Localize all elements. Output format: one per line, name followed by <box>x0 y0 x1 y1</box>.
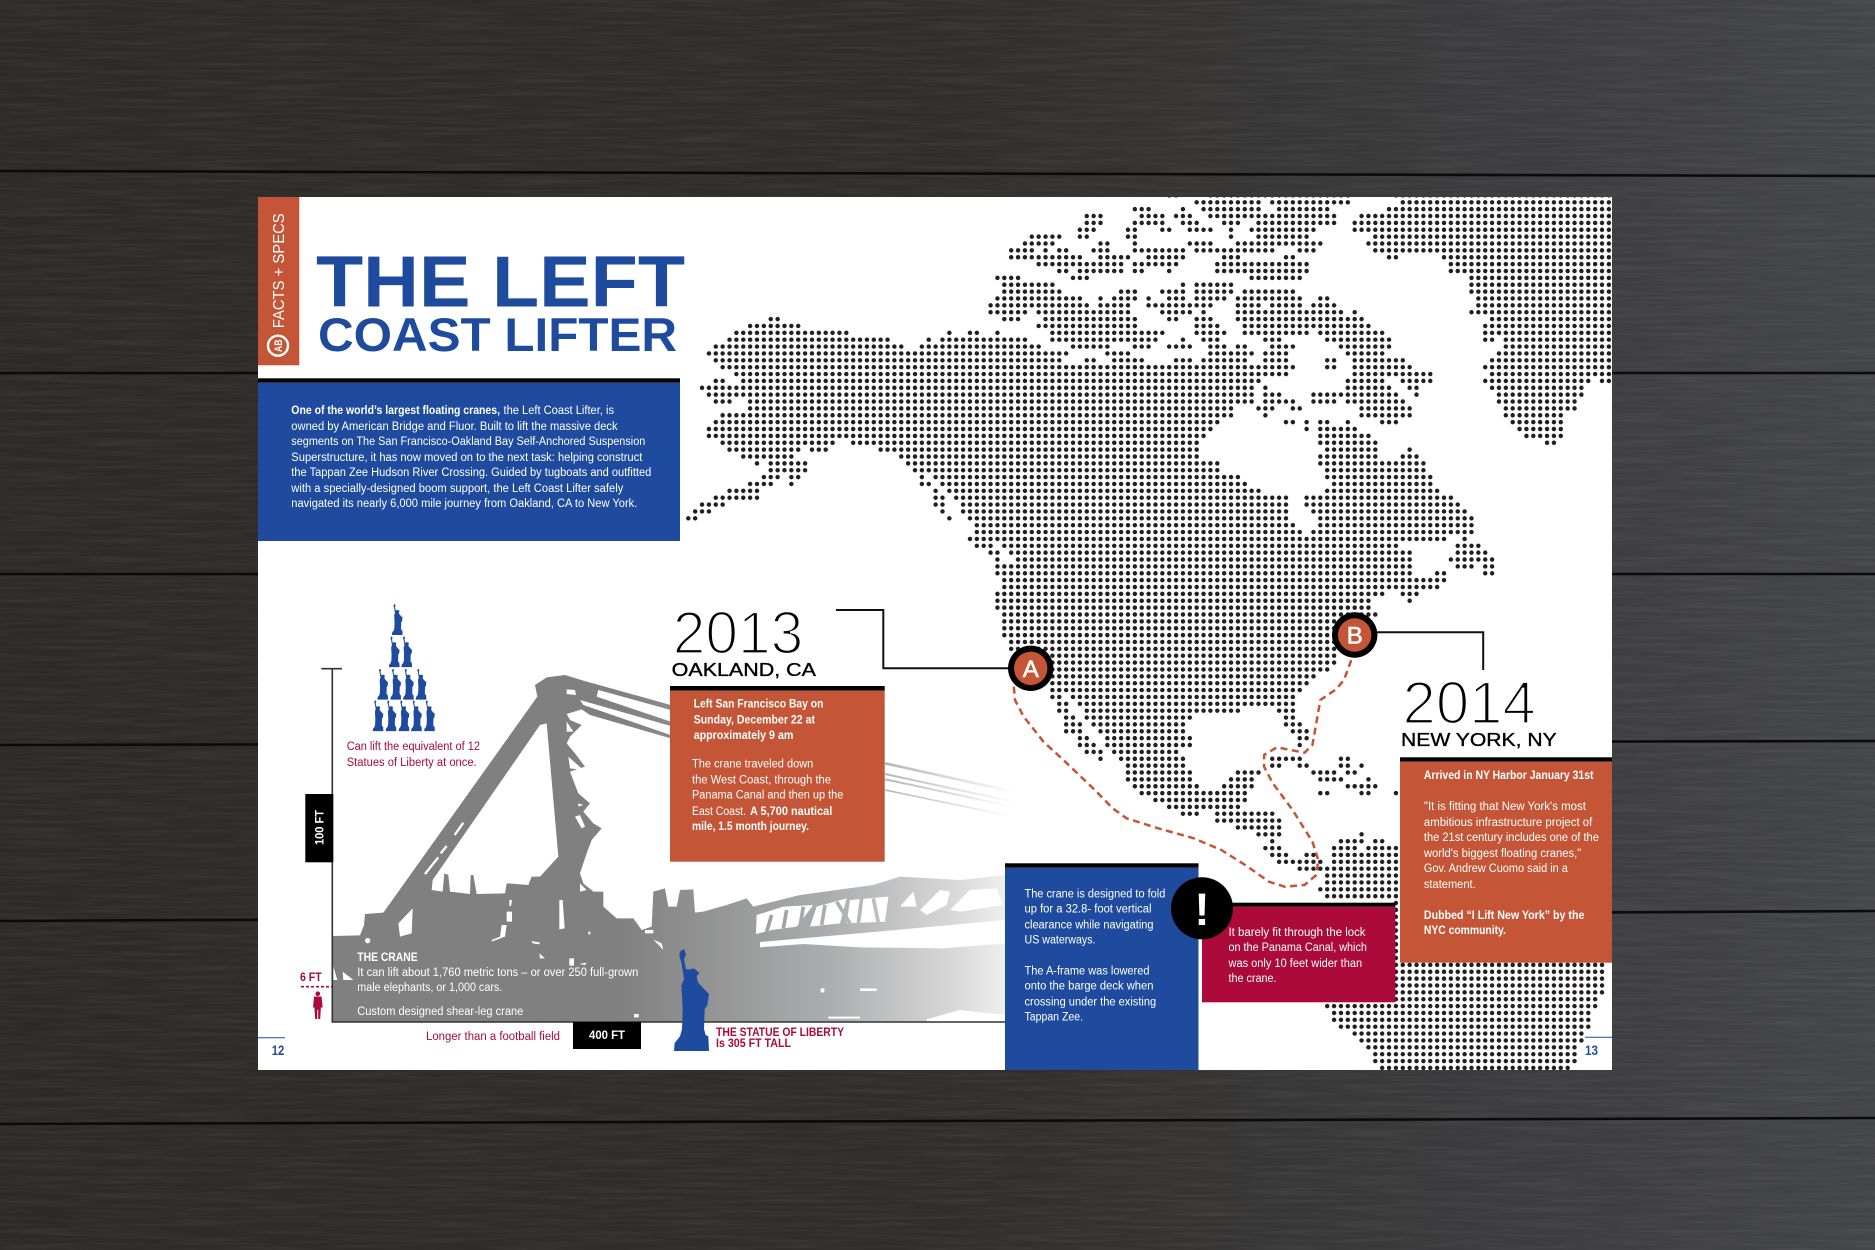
callout: lifting capacity: Statues of Liberty at once. <box>347 757 477 769</box>
label: 6 ft person: 6 FT <box>300 972 322 984</box>
panel: fold up for clearance <box>1005 863 1198 1070</box>
panel: fold up for clearance: up for a 32.8- foot vertical <box>1024 903 1152 915</box>
callout: lifting capacity: Can lift the equivalent of 12 <box>347 741 480 753</box>
panel: 2013 departure: Left San Francisco Bay on <box>694 699 823 711</box>
panel: 2014 arrival: world's biggest floating cranes," <box>1423 848 1581 860</box>
panel: intro: the Left Coast Lifter, is <box>504 405 614 417</box>
panel: 2013 departure: mile, 1.5 month journey. <box>692 821 809 833</box>
heading: 2013 Oakland: 2013 <box>673 599 803 666</box>
label: 400 ft length: 400 FT <box>589 1030 625 1042</box>
panel: fold up for clearance: The A-frame was lowered <box>1024 965 1150 977</box>
panel: fold up for clearance: onto the barge deck when <box>1024 980 1154 992</box>
panel: 2014 arrival: ambitious infrastructure project of <box>1424 817 1593 829</box>
panel: intro: owned by American Bridge and Fluor. Built to lift the massive deck <box>291 421 618 433</box>
route: dashed path from Oakland to New York <box>1014 658 1352 887</box>
page number 13 <box>1585 1037 1612 1058</box>
section tab: facts + specs <box>258 197 299 365</box>
heading: 2014 New York: NEW YORK, NY <box>1401 729 1557 750</box>
panel: panama canal: was only 10 feet wider than <box>1228 958 1362 970</box>
panel: intro: the Tappan Zee Hudson River Crossing. Guided by tugboats and outfitted <box>291 467 651 479</box>
panel: intro: navigated its nearly 6,000 mile journey from Oakland, CA to New York. <box>291 498 637 510</box>
label: statue of liberty height: Is 305 FT TALL <box>716 1038 791 1050</box>
icon: statue of liberty <box>674 949 709 1051</box>
heading: 2014 New York: 2014 <box>1402 669 1536 736</box>
panel: intro: Superstructure, it has now moved on to the next task: helping construct <box>291 452 643 464</box>
label: 400 ft length: Longer than a football field <box>426 1031 560 1043</box>
marker B: New York <box>1332 612 1377 658</box>
panel: panama canal: on the Panama Canal, which <box>1228 942 1367 954</box>
title: COAST LIFTER <box>318 308 677 361</box>
panel: fold up for clearance: The crane is designed to fold <box>1024 888 1165 900</box>
section tab: facts + specs: FACTS + SPECS <box>271 213 288 328</box>
panel: 2013 departure: A 5,700 nautical <box>750 806 832 818</box>
panel: 2014 arrival: Dubbed “I Lift New York” by the <box>1424 910 1584 922</box>
crane cables fading out past the orange box <box>885 763 1013 817</box>
crane silhouette with gradient fade <box>332 675 1005 1022</box>
panel: panama canal: It barely fit through the lock <box>1228 927 1366 939</box>
panel: 2014 arrival: NYC community. <box>1424 925 1506 937</box>
panel: panama canal <box>1202 903 1395 1002</box>
heading: 2013 Oakland: OAKLAND, CA <box>672 659 817 680</box>
label: statue of liberty height: THE STATUE OF LIBERTY <box>716 1027 844 1039</box>
panel: 2014 arrival: Gov. Andrew Cuomo said in a <box>1424 863 1568 875</box>
panel: 2013 departure: Panama Canal and then up the <box>692 790 843 802</box>
panel: intro <box>258 378 680 541</box>
panel: intro: with a specially-designed boom support, the Left Coast Lifter safely <box>290 483 624 495</box>
panel: 2014 arrival: Arrived in NY Harbor January 31st <box>1424 770 1594 782</box>
icon: exclamation badge <box>1171 877 1233 939</box>
panel: fold up for clearance: Tappan Zee. <box>1024 1011 1083 1023</box>
label: 6 ft person <box>300 972 332 1019</box>
label: 100 ft <box>305 794 333 862</box>
dotted world map <box>688 195 1610 1068</box>
panel: 2013 departure: The crane traveled down <box>692 759 813 771</box>
page number 12: 12 <box>272 1042 284 1058</box>
label: 100 ft: 100 FT <box>314 810 326 845</box>
page: white magazine spread <box>258 197 1612 1070</box>
section tab: facts + specs: AB <box>273 339 285 352</box>
panel: 2013 departure: East Coast. <box>692 806 746 818</box>
title <box>316 243 685 361</box>
connector line to marker A <box>836 610 1012 668</box>
crane description text: Custom designed shear-leg crane <box>357 1006 523 1018</box>
panel: intro: One of the world’s largest floating cranes, <box>291 405 500 417</box>
icon: exclamation badge: ! <box>1194 884 1210 935</box>
crane description text: THE CRANE <box>357 952 418 964</box>
crane description text <box>357 952 638 1018</box>
panel: fold up for clearance: crossing under the existing <box>1024 996 1156 1008</box>
panel: 2014 arrival: statement. <box>1424 879 1476 891</box>
axes: height and length <box>321 669 1005 1022</box>
label: 400 ft length <box>426 1022 641 1049</box>
marker B: New York: B <box>1347 623 1363 650</box>
crane description text: male elephants, or 1,000 cars. <box>357 982 502 994</box>
connector line to marker B <box>1377 632 1483 670</box>
page number 12 <box>258 1038 285 1058</box>
panel: 2014 arrival: the 21st century includes one of the <box>1424 832 1599 844</box>
panel: fold up for clearance: US waterways. <box>1024 934 1096 946</box>
panel: panama canal: the crane. <box>1228 973 1276 985</box>
callout: lifting capacity <box>347 741 480 769</box>
crane description text: It can lift about 1,760 metric tons – or over 250 full-grown <box>357 967 638 979</box>
panel: intro: segments on The San Francisco-Oakland Bay Self-Anchored Suspension <box>291 436 645 448</box>
panel: fold up for clearance: clearance while navigating <box>1024 919 1154 931</box>
label: statue of liberty height <box>716 1027 844 1050</box>
panel: 2013 departure <box>670 686 885 862</box>
panel: 2013 departure: approximately 9 am <box>694 730 793 742</box>
panel: 2013 departure: Sunday, December 22 at <box>694 715 815 727</box>
title: THE LEFT <box>316 243 685 323</box>
panel: 2013 departure: the West Coast, through the <box>692 775 831 787</box>
icon: pyramid of 12 statues of liberty <box>373 604 435 731</box>
panel: 2014 arrival: "It is fitting that New York's most <box>1424 801 1587 813</box>
marker A: Oakland <box>1008 646 1053 691</box>
page number 13: 13 <box>1585 1042 1598 1058</box>
marker A: Oakland: A <box>1023 656 1039 683</box>
panel: 2014 arrival <box>1400 757 1612 963</box>
